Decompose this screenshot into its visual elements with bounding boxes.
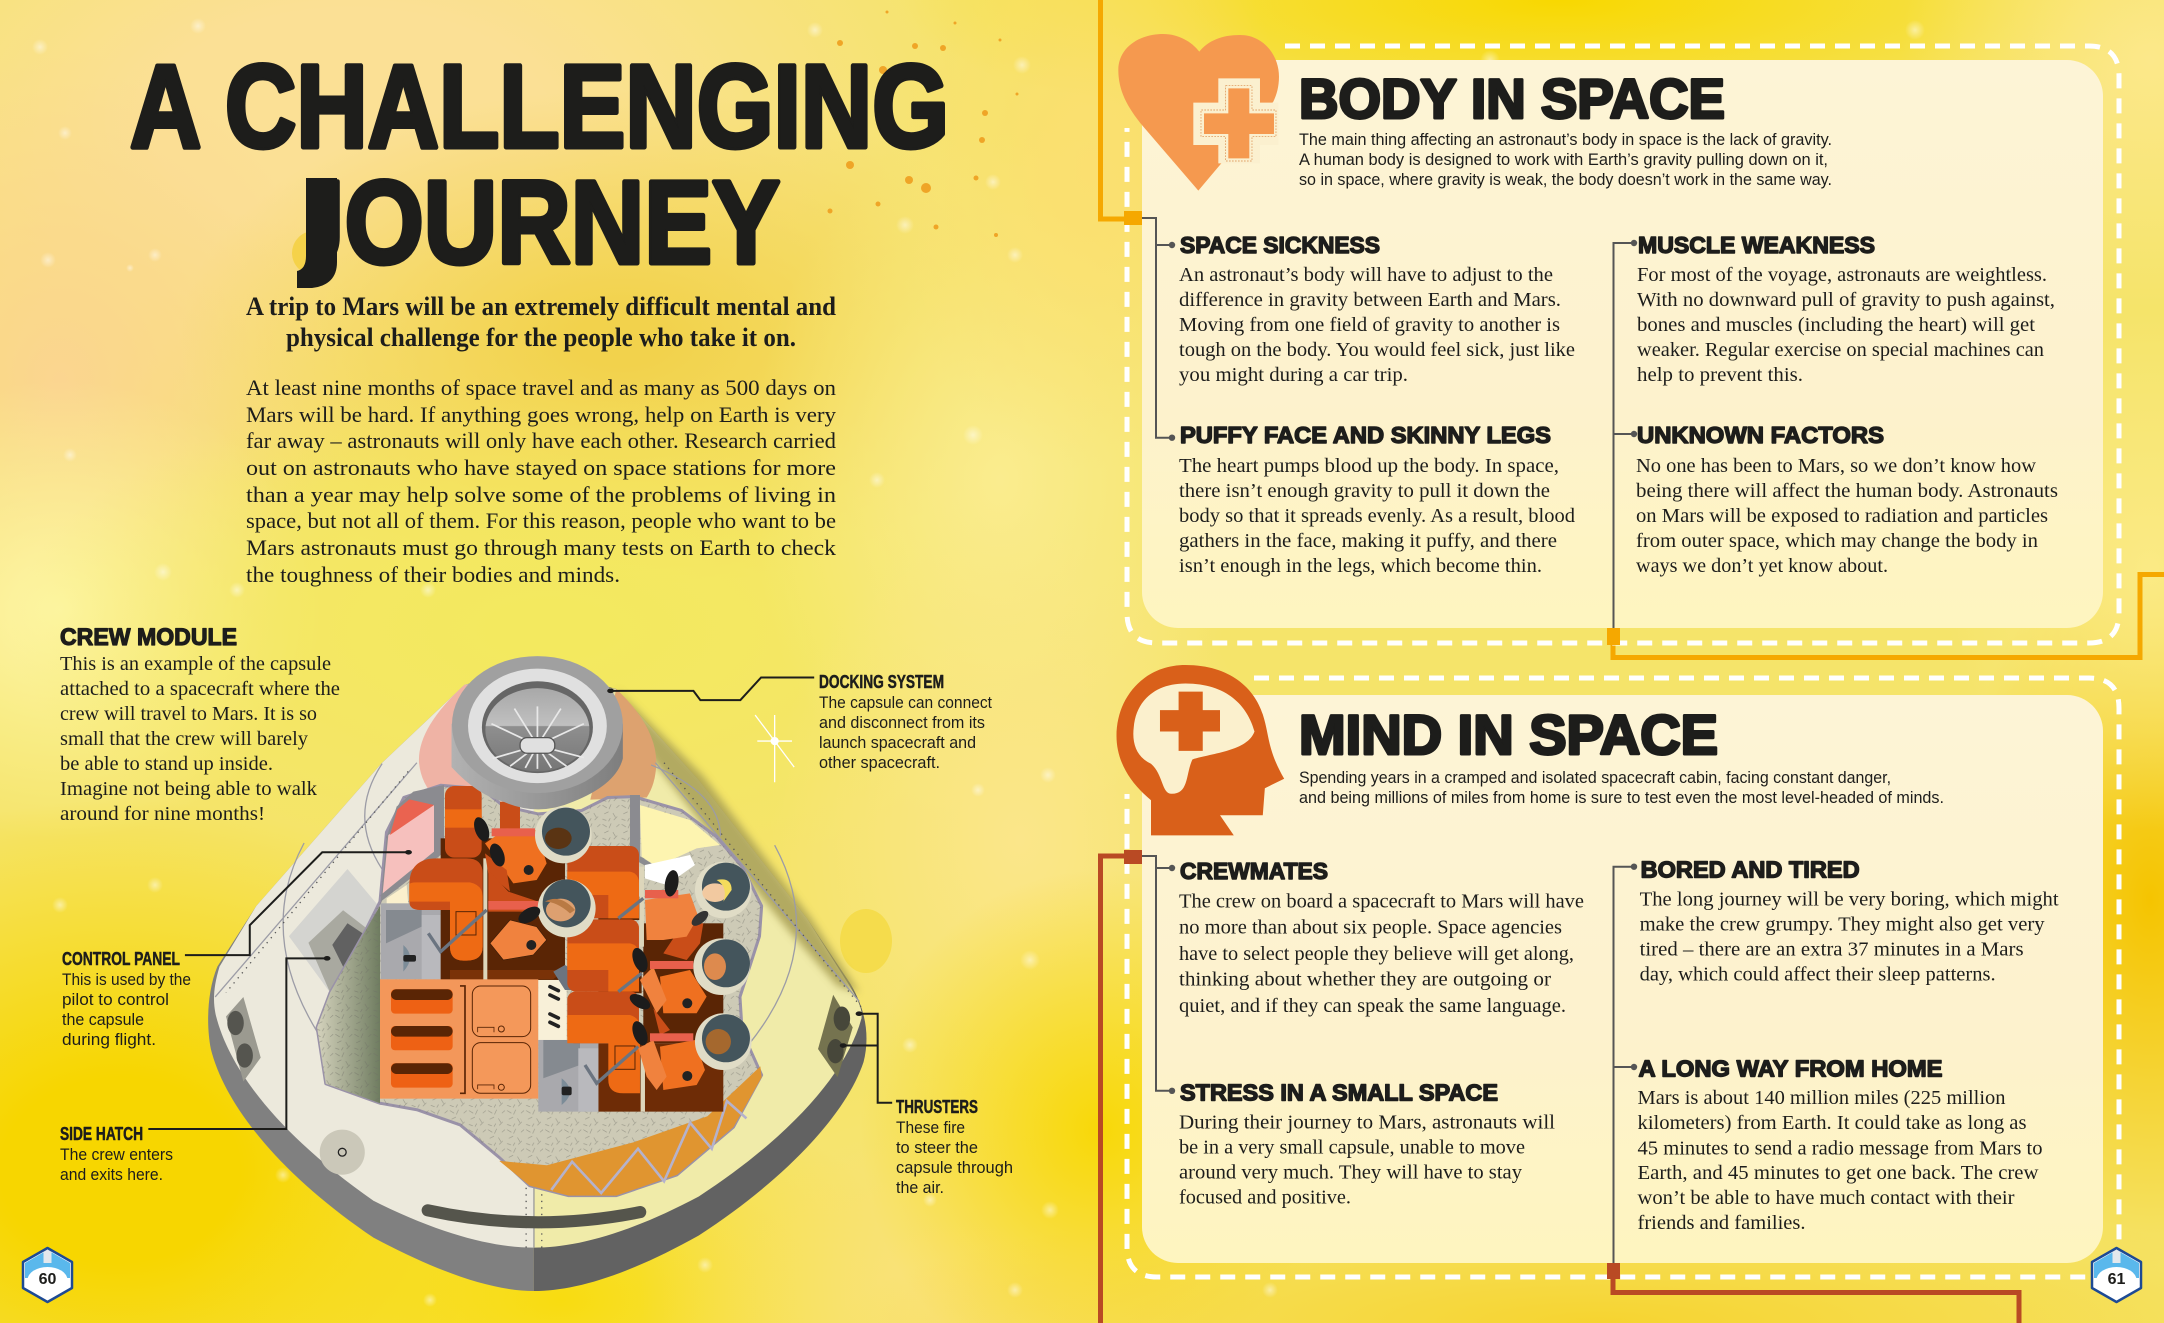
red connector (1100, 856, 2019, 1323)
crew module text: around for nine months! (60, 803, 265, 825)
callout: thrusters (896, 1097, 1013, 1197)
leader line: thrusters (840, 1011, 892, 1103)
callout: control panel: the capsule (62, 1010, 144, 1029)
section: crewmates: thinking about whether they are outgoing or (1179, 969, 1551, 991)
grey equipment left (381, 903, 441, 979)
callout: docking system: other spacecraft. (819, 753, 940, 772)
callout: side hatch: and exits here. (60, 1165, 163, 1184)
panel: mind in space (1116, 665, 2119, 1279)
section: bored and tired: BORED AND TIRED (1641, 856, 1860, 882)
section: a long way from home: Earth, and 45 minutes to get one back. The crew (1638, 1162, 2039, 1184)
page number 61: 61 (2108, 1271, 2126, 1288)
section: stress in a small space: During their journey to Mars, astronauts will (1179, 1112, 1555, 1134)
section: a long way from home: A LONG WAY FROM HOME (1638, 1056, 1942, 1082)
leader line: side hatch (148, 956, 331, 1129)
astronaut 3 (645, 862, 752, 960)
grey equipment right (538, 965, 598, 1112)
section: bored and tired: tired – there are an extra 37 minutes in a Mars (1640, 939, 2024, 961)
callout: control panel: pilot to control (62, 990, 169, 1009)
intro: and being millions of miles from home is sure to test even the most level-headed of minds. (1299, 788, 1944, 807)
crew module text: small that the crew will barely (60, 728, 309, 750)
crew capsule illustration (208, 656, 866, 1291)
callout: control panel (62, 949, 191, 1049)
section: unknown factors: being there will affect the human body. Astronauts (1636, 480, 2058, 502)
title (130, 41, 949, 289)
crew module text: CREW MODULE (60, 624, 237, 651)
callout: control panel: during flight. (62, 1030, 156, 1049)
astronaut 1 (471, 807, 592, 892)
docking ring (452, 656, 623, 809)
section: stress in a small space: STRESS IN A SMALL SPACE (1180, 1080, 1498, 1106)
section: space sickness: tough on the body. You would feel sick, just like (1179, 339, 1575, 361)
right thruster (818, 995, 853, 1077)
section: a long way from home: 45 minutes to send a radio message from Mars to (1638, 1137, 2042, 1159)
intro: A human body is designed to work with Earth’s gravity pulling down on it, (1299, 150, 1828, 169)
leader line: control panel (185, 850, 412, 955)
intro: so in space, where gravity is weak, the body doesn’t work in the same way. (1299, 170, 1832, 189)
callout: control panel: This is used by the (62, 970, 191, 989)
section: stress in a small space: around very much. They will have to stay (1179, 1162, 1523, 1184)
section: bored and tired: make the crew grumpy. They might also get very (1640, 914, 2045, 936)
section: a long way from home: kilometers) from Earth. It could take as long as (1638, 1112, 2027, 1134)
hull details (320, 1130, 640, 1222)
section: unknown factors: on Mars will be exposed to radiation and particles (1636, 505, 2048, 527)
section: space sickness: you might during a car trip. (1179, 364, 1408, 386)
heading: BODY IN SPACE (1299, 67, 1725, 130)
crew module text: attached to a spacecraft where the (60, 678, 340, 700)
callout: side hatch: The crew enters (60, 1145, 173, 1164)
section: muscle weakness: MUSCLE WEAKNESS (1638, 232, 1875, 258)
leader line: docking system (607, 677, 814, 700)
callout: thrusters: These fire (896, 1118, 965, 1137)
callout: thrusters: to steer the (896, 1138, 978, 1157)
astronaut 5 (627, 991, 752, 1090)
callout: control panel: CONTROL PANEL (62, 949, 180, 969)
right seats backing (598, 897, 723, 1112)
section: a long way from home: friends and families. (1638, 1212, 1806, 1234)
section: puffy face and skinny legs: The heart pumps blood up the body. In space, (1179, 455, 1559, 477)
section: space sickness: Moving from one field of gravity to another is (1179, 314, 1560, 336)
section: a long way from home: won’t be able to have much contact with their (1638, 1187, 2015, 1209)
section: stress in a small space (1179, 1080, 1555, 1209)
section: puffy face and skinny legs: there isn’t enough gravity to pull it down the (1179, 480, 1550, 502)
right seats (567, 846, 645, 1112)
section: muscle weakness: With no downward pull of gravity to push against, (1637, 289, 2055, 311)
control panel window (381, 785, 444, 905)
section: unknown factors: No one has been to Mars, so we don’t know how (1636, 455, 2036, 477)
section: a long way from home: Mars is about 140 million miles (225 million (1638, 1087, 2006, 1109)
title: JOURNEY (288, 157, 780, 289)
section: puffy face and skinny legs: gathers in the face, making it puffy, and there (1179, 530, 1557, 552)
crew module text (60, 624, 340, 825)
section: space sickness: difference in gravity between Earth and Mars. (1179, 289, 1561, 311)
page number 61 (2092, 1248, 2141, 1302)
astronaut 2 (488, 870, 596, 960)
section: space sickness: An astronaut’s body will have to adjust to the (1179, 264, 1553, 286)
intro text block: Mars astronauts must go through many tests on Earth to check (246, 535, 837, 560)
section: unknown factors (1636, 422, 2058, 577)
section: stress in a small space: focused and positive. (1179, 1187, 1351, 1209)
intro text block: space, but not all of them. For this reason, people who want to be (246, 508, 836, 533)
section: muscle weakness: weaker. Regular exercise on special machines can (1637, 339, 2044, 361)
section: crewmates: have to select people they believe will get along, (1179, 943, 1574, 965)
intro text block: out on astronauts who have stayed on space stations for more (246, 455, 836, 480)
subtitle (246, 292, 837, 352)
section: bored and tired (1640, 856, 2059, 986)
subtitle: physical challenge for the people who take it on. (286, 323, 796, 352)
section: stress in a small space: be in a very small capsule, unable to move (1179, 1136, 1525, 1158)
icon: head with cross (1116, 665, 1284, 835)
section: a long way from home (1638, 1056, 2042, 1234)
callout: docking system (819, 672, 992, 772)
section: bored and tired: The long journey will be very boring, which might (1640, 888, 2059, 910)
intro text block: At least nine months of space travel and as many as 500 days on (246, 375, 836, 400)
cabin interior (380, 785, 752, 1112)
section: crewmates: quiet, and if they can speak the same language. (1179, 995, 1566, 1017)
side hatch (289, 869, 382, 993)
connectors (1124, 850, 1637, 1279)
callout: side hatch (60, 1124, 173, 1184)
section: puffy face and skinny legs: PUFFY FACE AND SKINNY LEGS (1180, 422, 1551, 448)
callout: thrusters: THRUSTERS (896, 1097, 978, 1117)
panel: body in space (1118, 34, 2119, 645)
section: muscle weakness (1637, 232, 2055, 386)
intro (1299, 768, 1944, 807)
callout: docking system: DOCKING SYSTEM (819, 672, 944, 692)
callout: docking system: launch spacecraft and (819, 733, 976, 752)
subtitle: A trip to Mars will be an extremely difficult mental and (246, 292, 837, 321)
intro text block: than a year may help solve some of the problems of living in (246, 482, 836, 507)
section: space sickness (1179, 232, 1575, 386)
left seats (409, 786, 565, 980)
icon: heart with cross (1118, 34, 1279, 191)
capsule shell (208, 667, 866, 1291)
section: muscle weakness: help to prevent this. (1637, 364, 1803, 386)
section: crewmates (1179, 858, 1584, 1017)
intro: The main thing affecting an astronaut’s body in space is the lack of gravity. (1299, 130, 1832, 149)
star (755, 715, 794, 782)
title: A CHALLENGING (130, 41, 949, 173)
callout: side hatch: SIDE HATCH (60, 1124, 143, 1144)
crew module text: Imagine not being able to walk (60, 778, 318, 800)
connectors (1124, 211, 1637, 645)
astronaut 4 (629, 938, 750, 1013)
section: puffy face and skinny legs: isn’t enough in the legs, which become thin. (1179, 555, 1542, 577)
callout: docking system: and disconnect from its (819, 713, 985, 732)
section: crewmates: CREWMATES (1180, 858, 1328, 884)
page number 60 (23, 1248, 72, 1302)
intro: Spending years in a cramped and isolated spacecraft cabin, facing constant danger, (1299, 768, 1891, 787)
heading: MIND IN SPACE (1299, 703, 1718, 766)
crew module text: This is an example of the capsule (60, 653, 331, 675)
gold connector (1100, 0, 2164, 658)
intro (1299, 130, 1832, 189)
section: muscle weakness: bones and muscles (including the heart) will get (1637, 314, 2035, 336)
section: unknown factors: ways we don’t yet know about. (1636, 555, 1888, 577)
left thruster (226, 997, 261, 1082)
section: crewmates: The crew on board a spacecraft to Mars will have (1179, 890, 1584, 912)
cabin window (630, 795, 720, 885)
crew module text: be able to stand up inside. (60, 753, 273, 775)
intro text block (246, 375, 837, 587)
cabin cut-out (317, 785, 762, 1196)
section: puffy face and skinny legs (1179, 422, 1575, 577)
callout: thrusters: capsule through (896, 1158, 1013, 1177)
intro text block: Mars will be hard. If anything goes wrong, help on Earth is very (246, 402, 837, 427)
section: crewmates: no more than about six people. Space agencies (1179, 917, 1562, 939)
section: bored and tired: day, which could affect their sleep patterns. (1640, 964, 1996, 986)
callout: docking system: The capsule can connect (819, 693, 992, 712)
section: unknown factors: from outer space, which may change the body in (1636, 530, 2038, 552)
intro text block: the toughness of their bodies and minds. (246, 562, 620, 587)
intro text block: far away – astronauts will only have each other. Research carried (246, 428, 836, 453)
section: puffy face and skinny legs: body so that it spreads evenly. As a result, blood (1179, 505, 1575, 527)
section: space sickness: SPACE SICKNESS (1180, 232, 1380, 258)
section: unknown factors: UNKNOWN FACTORS (1637, 422, 1884, 448)
callout: thrusters: the air. (896, 1178, 944, 1197)
lockers (380, 979, 538, 1099)
crew module text: crew will travel to Mars. It is so (60, 703, 317, 725)
page number 60: 60 (39, 1271, 56, 1288)
section: muscle weakness: For most of the voyage, astronauts are weightless. (1637, 264, 2047, 286)
